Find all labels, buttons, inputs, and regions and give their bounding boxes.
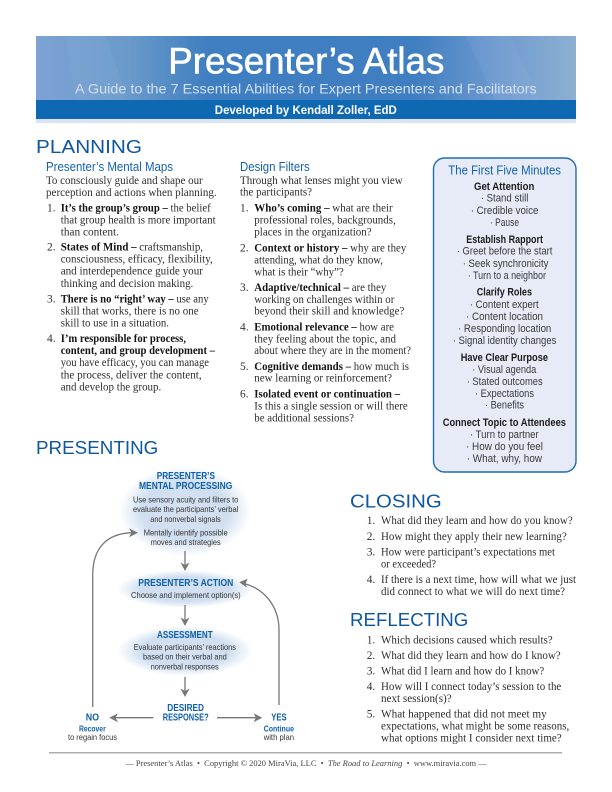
design filters: Is this a single session or will there xyxy=(254,400,408,412)
reflecting heading: REFLECTING xyxy=(350,609,468,630)
presenter's mental maps: skill to use in a situation. xyxy=(61,318,169,330)
presenter's mental maps: content, and group development – xyxy=(61,345,215,357)
closing heading: CLOSING xyxy=(350,490,442,511)
node: presenter's mental processing xyxy=(119,466,251,556)
design filters: 4. xyxy=(240,321,249,333)
presenter's mental maps: 1. xyxy=(47,203,56,215)
get attention: · Stand still xyxy=(481,193,528,205)
presenter's mental maps: the process, deliver the content, xyxy=(61,369,202,381)
connect topic to attendees: · Turn to partner xyxy=(470,429,539,441)
presenter's mental maps: I’m responsible for process, xyxy=(61,333,186,345)
presenter's mental maps: 4. xyxy=(47,333,56,345)
design filters: Cognitive demands – how much is xyxy=(254,361,410,373)
presenter's mental maps: Presenter’s Mental Maps xyxy=(46,160,173,174)
clarify roles xyxy=(453,287,557,347)
establish rapport: · Turn to a neighbor xyxy=(468,270,546,282)
reflecting questions: 5. xyxy=(367,709,375,721)
subtitle: A Guide to the 7 Essential Abilities for Expert Presenters and Facilitators xyxy=(75,80,537,96)
design filters: what is their “why”? xyxy=(254,266,344,278)
closing questions: What did they learn and how do you know? xyxy=(381,515,573,527)
panel: the first five minutes xyxy=(434,158,576,472)
node: presenter's mental processing: and nonverbal signals xyxy=(150,514,221,524)
design filters: 1. xyxy=(240,203,249,215)
footer: — Presenter’s Atlas • Copyright © 2020 MiraVia, LLC • The Road to Learning • www.miravia.com — xyxy=(124,758,487,768)
have clear purpose xyxy=(461,352,548,412)
design filters: new learning or reinforcement? xyxy=(254,373,392,385)
reflecting questions: What did they learn and how do I know? xyxy=(381,650,561,662)
have clear purpose: · Expectations xyxy=(475,388,535,400)
arrow: yes loops back to action xyxy=(239,579,279,705)
get attention: Get Attention xyxy=(474,181,534,193)
clarify roles: Clarify Roles xyxy=(477,287,532,299)
node: presenter's action: PRESENTER’S ACTION xyxy=(138,578,233,589)
get attention xyxy=(471,181,538,229)
node: assessment: Evaluate participants’ reactions xyxy=(134,642,236,652)
planning heading: PLANNING xyxy=(36,136,142,157)
panel: closing xyxy=(350,490,577,598)
design filters: be additional sessions? xyxy=(254,412,354,424)
reflecting questions: What did I learn and how do I know? xyxy=(381,665,544,677)
establish rapport: Establish Rapport xyxy=(466,234,543,246)
node: presenter's mental processing: MENTAL PROCESSING xyxy=(139,481,232,492)
reflecting questions: Which decisions caused which results? xyxy=(381,634,553,646)
design filters xyxy=(240,160,411,424)
design filters: working on challenges within or xyxy=(254,294,394,306)
title: Presenter’s Atlas xyxy=(168,40,444,81)
closing questions: did connect to what we will do next time? xyxy=(381,586,565,598)
reflecting questions xyxy=(367,634,569,745)
presenter's mental maps: than content. xyxy=(61,226,119,238)
reflecting questions: expectations, what might be some reasons, xyxy=(381,721,569,733)
node: presenter's mental processing: evaluate the participants’ verbal xyxy=(133,504,238,514)
establish rapport: · Seek synchronicity xyxy=(463,258,549,270)
presenter's mental maps xyxy=(46,160,217,393)
establish rapport: · Greet before the start xyxy=(457,246,552,258)
get attention: · Credible voice xyxy=(471,205,538,217)
node: presenter's mental processing: Mentally identify possible xyxy=(144,527,228,537)
presenter's mental maps: To consciously guide and shape our xyxy=(46,175,203,187)
first five minutes title: The First Five Minutes xyxy=(448,163,561,177)
outcome: no: NO xyxy=(86,713,99,724)
reflecting questions: How will I connect today’s session to the xyxy=(381,681,561,693)
author line: Developed by Kendall Zoller, EdD xyxy=(215,105,397,117)
design filters: they feeling about the topic, and xyxy=(254,333,396,345)
design filters: 3. xyxy=(240,282,249,294)
outcome: no: to regain focus xyxy=(68,732,117,742)
reflecting questions: next session(s)? xyxy=(381,693,452,705)
node: presenter's action xyxy=(117,570,253,608)
have clear purpose: Have Clear Purpose xyxy=(461,352,548,364)
outcome: yes xyxy=(263,713,294,742)
design filters: professional roles, backgrounds, xyxy=(254,214,396,226)
design filters: Emotional relevance – how are xyxy=(254,321,394,333)
reflecting questions: 2. xyxy=(367,650,375,662)
node: assessment: ASSESSMENT xyxy=(157,630,213,641)
clarify roles: · Content location xyxy=(466,311,543,323)
design filters: attending, what do they know, xyxy=(254,254,383,266)
presenter's mental maps: There is no “right’ way – use any xyxy=(61,293,209,305)
arrow: action to assessment xyxy=(180,605,190,626)
have clear purpose: · Visual agenda xyxy=(472,364,536,376)
outcome: yes: with plan xyxy=(263,732,294,742)
panel: presenting xyxy=(36,437,294,742)
connect topic to attendees xyxy=(443,417,566,465)
clarify roles: · Content expert xyxy=(470,299,539,311)
arrow: assessment to desired response xyxy=(180,677,190,697)
get attention: · Pause xyxy=(490,217,519,229)
connect topic to attendees: · What, why, how xyxy=(467,453,542,465)
closing questions: or exceeded? xyxy=(381,558,436,570)
design filters: Who’s coming – what are their xyxy=(254,203,393,215)
node: desired response xyxy=(163,703,209,724)
presenter's mental maps: and develop the group. xyxy=(61,381,161,393)
design filters: 2. xyxy=(240,242,249,254)
arrow: to no xyxy=(109,713,153,722)
closing questions: 1. xyxy=(367,515,375,527)
banner xyxy=(36,36,576,123)
clarify roles: · Responding location xyxy=(458,323,551,335)
closing questions: 4. xyxy=(367,574,375,586)
outcome: yes: Continue xyxy=(264,724,294,733)
design filters: Design Filters xyxy=(240,160,310,174)
presenter's mental maps: It’s the group’s group – the belief xyxy=(61,203,211,215)
presenter's mental maps: and interdependence guide your xyxy=(61,266,203,278)
have clear purpose: · Benefits xyxy=(485,400,525,412)
presenter's mental maps: that group health is more important xyxy=(61,215,217,227)
outcome: no xyxy=(68,713,117,742)
presenter's mental maps: States of Mind – craftsmanship, xyxy=(61,242,203,254)
design filters: Isolated event or continuation – xyxy=(254,388,400,400)
node: assessment: based on their verbal and xyxy=(143,651,227,661)
clarify roles: · Signal identity changes xyxy=(453,335,557,347)
node: presenter's action: Choose and implement option(s) xyxy=(131,590,241,600)
reflecting questions: 3. xyxy=(367,665,375,677)
design filters: Through what lenses might you view xyxy=(240,175,403,187)
design filters: 6. xyxy=(240,388,249,400)
design filters: Adaptive/technical – are they xyxy=(254,282,387,294)
arrow: no loops back to mental processing xyxy=(93,528,138,707)
design filters: Context or history – why are they xyxy=(254,242,407,254)
closing questions xyxy=(367,515,577,598)
connect topic to attendees: Connect Topic to Attendees xyxy=(443,417,566,429)
panel: planning xyxy=(36,136,411,424)
presenter's mental maps: 3. xyxy=(47,293,56,305)
node: presenter's mental processing: PRESENTER’S xyxy=(157,471,215,482)
presenter's mental maps: you have efficacy, you can manage xyxy=(61,357,209,369)
design filters: places in the organization? xyxy=(254,227,372,239)
have clear purpose: · Stated outcomes xyxy=(467,376,543,388)
closing questions: 2. xyxy=(367,531,375,543)
reflecting questions: 1. xyxy=(367,634,375,646)
presenting heading: PRESENTING xyxy=(36,437,158,458)
closing questions: How were participant’s expectations met xyxy=(381,546,556,558)
presenter's mental maps: 2. xyxy=(47,242,56,254)
node: presenter's mental processing: moves and strategies xyxy=(151,537,221,547)
closing questions: If there is a next time, how will what we just xyxy=(381,574,577,586)
node: assessment xyxy=(117,626,253,676)
arrow: to yes xyxy=(217,713,262,722)
reflecting questions: What happened that did not meet my xyxy=(381,709,547,721)
node: desired response: DESIRED xyxy=(167,703,204,714)
reflecting questions: 4. xyxy=(367,681,375,693)
presenter's mental maps: skill that works, there is no one xyxy=(61,305,199,317)
design filters: beyond their skill and knowledge? xyxy=(254,306,404,318)
design filters: the participants? xyxy=(240,187,312,199)
node: presenter's mental processing: Use sensory acuity and filters to xyxy=(133,494,239,504)
design filters: about where they are in the moment? xyxy=(254,345,411,357)
arrow: processing to action xyxy=(180,551,190,571)
outcome: yes: YES xyxy=(271,713,287,724)
node: desired response: RESPONSE? xyxy=(163,713,209,724)
node: assessment: nonverbal responses xyxy=(151,661,219,671)
presenter's mental maps: thinking and decision making. xyxy=(61,278,193,290)
establish rapport xyxy=(457,234,552,282)
presenter's mental maps: consciousness, efficacy, flexibility, xyxy=(61,254,213,266)
design filters: 5. xyxy=(240,361,249,373)
reflecting questions: what options might I consider next time? xyxy=(381,733,562,745)
outcome: no: Recover xyxy=(79,724,106,733)
closing questions: How might they apply their new learning? xyxy=(381,531,567,543)
connect topic to attendees: · How do you feel xyxy=(466,441,543,453)
panel: reflecting xyxy=(350,609,569,745)
presenter's mental maps: perception and actions when planning. xyxy=(46,187,217,199)
closing questions: 3. xyxy=(367,546,375,558)
